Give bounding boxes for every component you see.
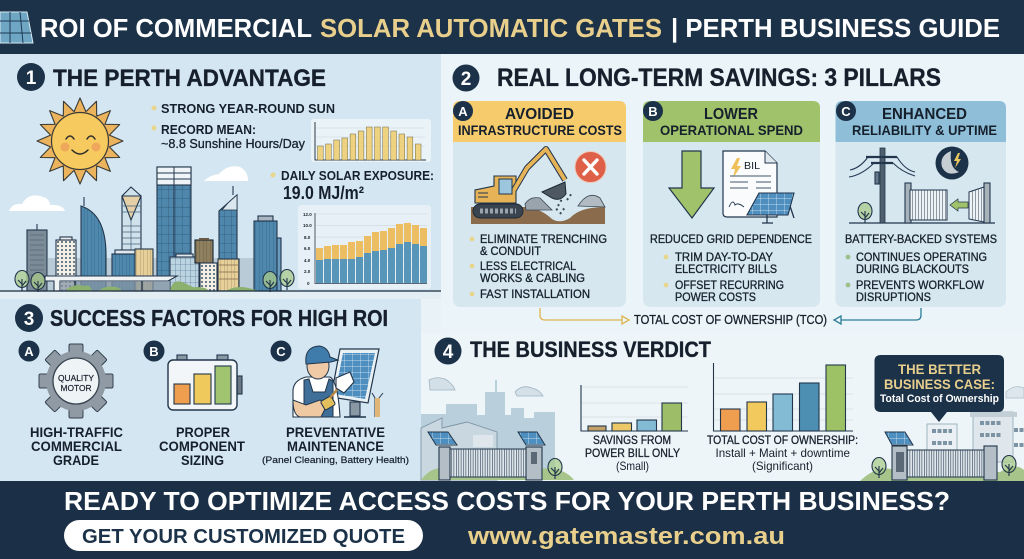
chart: daily solar exposure: 10.0 xyxy=(303,223,312,228)
title: SOLAR AUTOMATIC GATES xyxy=(320,13,662,43)
chart: daily solar exposure: 6.0 xyxy=(304,246,311,251)
factor B: component sizing: COMPONENT xyxy=(159,438,245,454)
elevated walkway xyxy=(45,276,177,291)
callout: the better business case: BUSINESS CASE: xyxy=(884,377,995,392)
icon: red cross xyxy=(575,152,606,182)
panel: the Perth advantage xyxy=(0,54,441,299)
solar exposure fact: 19.0 MJ/m² xyxy=(283,183,364,203)
chart: total cost of ownership: (Significant) xyxy=(752,459,813,473)
chart: daily solar exposure: 12.0 xyxy=(303,212,312,217)
callout: the better business case: THE BETTER xyxy=(898,362,981,377)
chart: monthly sunshine hours xyxy=(311,119,431,162)
list A: ELIMINATE TRENCHING xyxy=(480,232,607,246)
list B: OFFSET RECURRING xyxy=(675,278,784,292)
title: | PERTH BUSINESS GUIDE xyxy=(671,13,1000,43)
pillar C: enhanced reliability: C xyxy=(841,104,851,119)
chart: daily solar exposure: 4.0 xyxy=(304,258,311,263)
title xyxy=(40,13,1000,43)
chart: savings from power bill only xyxy=(581,385,688,473)
icon: worker cleaning panel xyxy=(293,346,383,417)
arrow: from pillars to TCO (right) xyxy=(834,308,921,324)
sunshine facts: STRONG YEAR-ROUND SUN xyxy=(161,101,335,116)
panel: real long-term savings xyxy=(441,54,1024,333)
header banner xyxy=(0,0,1024,54)
factor C: preventative maintenance: PREVENTATIVE xyxy=(286,424,385,440)
pillar B: lower operational spend: LOWER xyxy=(704,106,758,123)
list B: TRIM DAY-TO-DAY xyxy=(675,250,773,264)
factor B: component sizing: SIZING xyxy=(181,452,224,468)
arrow: from pillars to TCO (left) xyxy=(540,308,629,324)
button: get your customized quote: GET YOUR CUSTOMIZED QUOTE xyxy=(82,526,405,548)
factor C: preventative maintenance: (Panel Cleaning, Battery Health) xyxy=(262,455,409,466)
icon: sliding gate xyxy=(905,183,990,223)
factor B: component sizing: B xyxy=(149,344,159,359)
icon: bill and solar panel xyxy=(723,151,794,223)
factor A: quality motor: GRADE xyxy=(53,452,99,468)
icon: excavator xyxy=(471,149,605,224)
list A xyxy=(470,232,607,301)
pillar A: avoided infrastructure costs: INFRASTRUCTURE COSTS xyxy=(458,122,622,138)
chart: savings from power bill only: POWER BILL ONLY xyxy=(585,446,680,460)
footer headline: READY TO OPTIMIZE ACCESS COSTS FOR YOUR PERTH BUSINESS? xyxy=(64,486,950,516)
icon: gear: MOTOR xyxy=(60,383,92,393)
list B xyxy=(650,232,812,304)
solar exposure fact xyxy=(270,168,434,203)
factor A: quality motor: A xyxy=(24,344,34,359)
pillar A: avoided infrastructure costs: A xyxy=(458,104,468,119)
pillar B: lower operational spend: OPERATIONAL SPEND xyxy=(660,122,803,138)
heading 4: 4 xyxy=(443,342,454,363)
factor B: component sizing xyxy=(144,340,245,468)
pillar A: avoided infrastructure costs: AVOIDED xyxy=(505,106,574,123)
chart: savings from power bill only: (Small) xyxy=(616,459,649,473)
illustration: solar gate with modern buildings xyxy=(860,387,1024,481)
panel: success factors xyxy=(0,292,441,481)
illustration: gate with old city xyxy=(421,378,574,480)
icon: smiling sun xyxy=(37,98,123,184)
illustration: Perth skyline xyxy=(0,166,441,293)
list B: POWER COSTS xyxy=(675,290,756,304)
sunshine facts: RECORD MEAN: xyxy=(161,122,256,137)
sunshine facts: ~8.8 Sunshine Hours/Day xyxy=(161,136,305,151)
heading 1: THE PERTH ADVANTAGE xyxy=(53,65,326,92)
button: get your customized quote xyxy=(64,520,423,551)
list B: ELECTRICITY BILLS xyxy=(675,262,777,276)
list C xyxy=(845,232,997,304)
list C: DURING BLACKOUTS xyxy=(856,262,969,276)
sunshine facts xyxy=(152,101,335,151)
factor C: preventative maintenance: C xyxy=(276,344,286,359)
factor C: preventative maintenance xyxy=(262,340,409,466)
icon: down arrow xyxy=(669,151,714,218)
icon: bill and solar panel: BIL xyxy=(744,160,760,172)
callout: the better business case: Total Cost of Ownership xyxy=(880,393,999,405)
list A: LESS ELECTRICAL xyxy=(480,259,576,273)
factor A: quality motor: COMMERCIAL xyxy=(31,438,122,454)
pillar C: enhanced reliability: ENHANCED xyxy=(882,106,967,123)
factor A: quality motor: HIGH-TRAFFIC xyxy=(30,424,123,440)
chart: daily solar exposure: 2.0 xyxy=(304,269,311,274)
total cost of ownership label: TOTAL COST OF OWNERSHIP (TCO) xyxy=(634,313,827,327)
list A: & CONDUIT xyxy=(480,244,542,258)
list C: CONTINUES OPERATING xyxy=(856,250,987,264)
heading 3: SUCCESS FACTORS FOR HIGH ROI xyxy=(50,305,388,331)
icon: gear: QUALITY xyxy=(58,373,94,383)
heading 2: 2 xyxy=(461,69,471,90)
chart: total cost of ownership: Install + Maint + downtime xyxy=(716,446,850,460)
shrubs xyxy=(65,281,258,291)
pillar B: lower operational spend xyxy=(643,101,820,307)
factor C: preventative maintenance: MAINTENANCE xyxy=(287,438,384,454)
list C: BATTERY-BACKED SYSTEMS xyxy=(845,232,997,246)
icon: battery xyxy=(168,355,242,410)
list A: FAST INSTALLATION xyxy=(480,287,590,301)
icon: moon and bolt xyxy=(936,146,968,180)
heading 4: THE BUSINESS VERDICT xyxy=(470,337,712,362)
panel: the business verdict xyxy=(421,333,1024,481)
solar exposure fact: DAILY SOLAR EXPOSURE: xyxy=(281,168,434,183)
pillar B: lower operational spend: B xyxy=(648,104,658,119)
chart: daily solar exposure: 0 xyxy=(307,281,310,286)
list A: WORKS & CABLING xyxy=(480,271,585,285)
footer call to action xyxy=(0,481,1024,559)
icon: power pole xyxy=(849,148,995,223)
website address: www.gatemaster.com.au xyxy=(467,523,785,550)
chart: daily solar exposure xyxy=(298,205,431,289)
chart: savings from power bill only: SAVINGS FROM xyxy=(593,433,671,447)
pillar C: enhanced reliability: RELIABILITY & UPTIME xyxy=(852,122,997,138)
chart: total cost of ownership: TOTAL COST OF OWNERSHIP: xyxy=(707,433,858,447)
list B: REDUCED GRID DEPENDENCE xyxy=(650,232,812,246)
callout: the better business case xyxy=(874,355,1004,422)
pillar A: avoided infrastructure costs xyxy=(453,101,626,307)
decorative clouds xyxy=(9,166,248,211)
title: ROI OF COMMERCIAL xyxy=(40,13,312,43)
heading 1: 1 xyxy=(26,68,37,89)
heading 3: 3 xyxy=(24,309,34,330)
factor B: component sizing: PROPER xyxy=(176,424,230,440)
list C: PREVENTS WORKFLOW xyxy=(856,278,985,292)
pillar C: enhanced reliability xyxy=(836,101,1006,307)
heading 2: REAL LONG-TERM SAVINGS: 3 PILLARS xyxy=(497,64,941,92)
list C: DISRUPTIONS xyxy=(856,290,931,304)
chart: total cost of ownership xyxy=(707,363,858,473)
icon: solar panel xyxy=(0,12,33,43)
factor A: quality motor xyxy=(18,340,123,468)
chart: daily solar exposure: 8.0 xyxy=(304,235,311,240)
icon: gear xyxy=(39,344,113,418)
